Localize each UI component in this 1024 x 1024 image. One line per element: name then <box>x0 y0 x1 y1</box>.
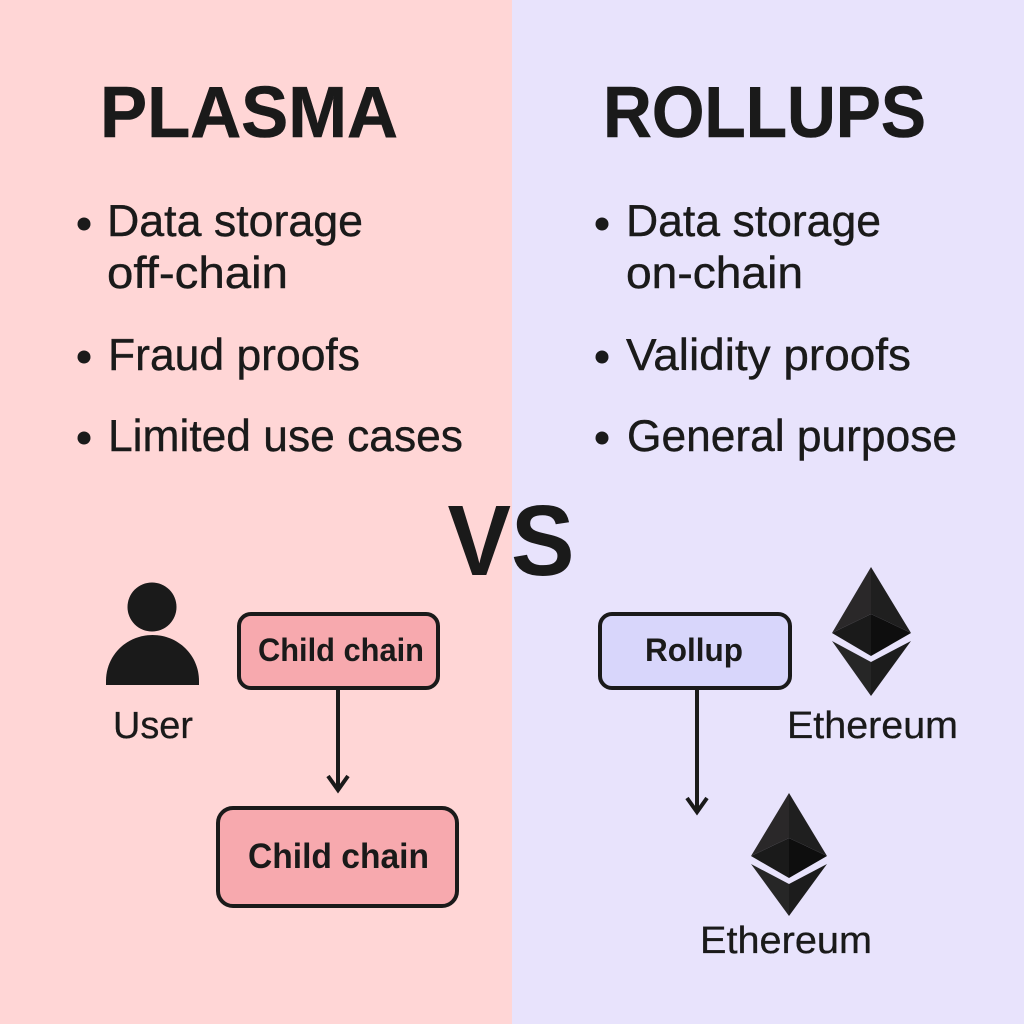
arrow: rollup to ethereum <box>687 688 707 812</box>
heading: ROLLUPS: ROLLUPS <box>603 73 926 153</box>
panel: plasma <box>0 0 512 1024</box>
bullet list: plasma features: Data storage <box>107 197 363 246</box>
box: rollup: Rollup <box>645 632 743 668</box>
icon: ethereum lower <box>751 793 827 916</box>
icon: user <box>106 582 199 685</box>
box: upper child chain <box>239 614 438 688</box>
bullet list: rollups features <box>596 197 957 461</box>
bullet list: plasma features <box>78 197 463 461</box>
label: User: User <box>113 705 193 747</box>
bullet list: rollups features: on-chain <box>626 249 803 298</box>
icon: ethereum upper <box>832 567 911 696</box>
bullet list: plasma features: off-chain <box>107 249 288 298</box>
box: lower child chain <box>218 808 457 906</box>
bullet list: plasma features: Fraud proofs <box>108 331 360 380</box>
heading: VS: VS <box>448 485 574 597</box>
bullet list: rollups features: General purpose <box>627 412 957 461</box>
heading: PLASMA: PLASMA <box>100 73 398 153</box>
box: rollup <box>600 614 790 688</box>
bullet list: rollups features: Data storage <box>626 197 881 246</box>
bullet list: plasma features: Limited use cases <box>108 412 463 461</box>
label: Ethereum upper: Ethereum <box>787 705 958 747</box>
box: upper child chain: Child chain <box>258 632 424 668</box>
box: lower child chain: Child chain <box>248 837 429 876</box>
label: Ethereum lower: Ethereum <box>700 920 872 962</box>
arrow: child chain to child chain <box>328 689 348 790</box>
panel: rollups <box>512 0 1024 1024</box>
bullet list: rollups features: Validity proofs <box>626 331 911 380</box>
